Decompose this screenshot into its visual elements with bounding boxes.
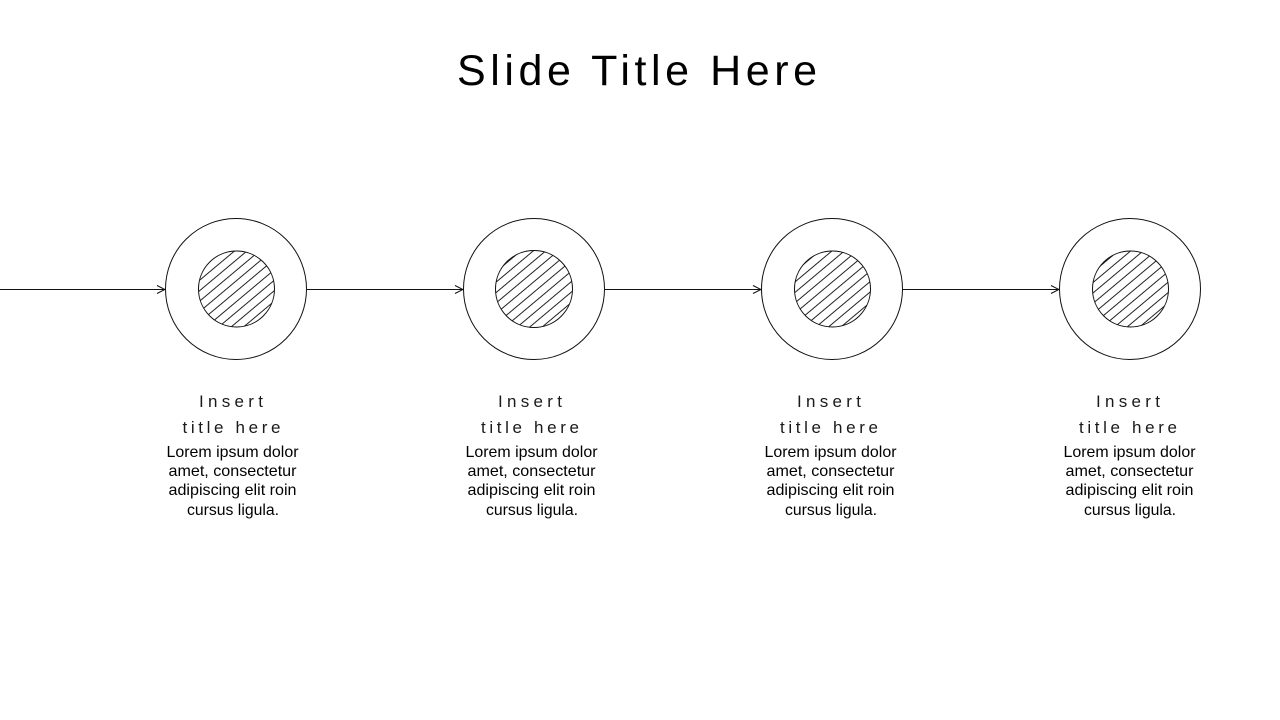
- step 1: [166, 218, 306, 519]
- step 1 heading: Insert: [199, 392, 263, 411]
- step 2: [464, 218, 604, 519]
- step 1 body text: Lorem ipsum dolor: [166, 444, 299, 461]
- step 3 body text: Lorem ipsum dolor: [764, 444, 897, 461]
- arrow: entry to step 1: [0, 288, 165, 290]
- step 4 heading: Insert: [1096, 392, 1160, 411]
- step 3 body text: amet, consectetur: [766, 463, 895, 480]
- step 4 body text: adipiscing elit roin: [1066, 482, 1194, 499]
- step 3 heading: title here: [780, 418, 878, 437]
- step 4 body text: Lorem ipsum dolor: [1064, 444, 1196, 461]
- step 2 body text: cursus ligula.: [486, 502, 578, 519]
- step 2 heading: Insert: [498, 392, 562, 411]
- icon: step 2 target circle: [464, 218, 604, 360]
- icon: step 3 target circle: [762, 218, 902, 360]
- step 1 body text: adipiscing elit roin: [168, 482, 296, 499]
- title: Slide Title Here: [457, 47, 817, 95]
- step 4: [1060, 218, 1200, 519]
- step 2 body text: amet, consectetur: [468, 463, 596, 480]
- step 1 body text: amet, consectetur: [168, 463, 297, 480]
- step 4 body text: amet, consectetur: [1066, 463, 1194, 480]
- step 4 body text: cursus ligula.: [1084, 502, 1176, 519]
- arrow: step 3 to step 4: [903, 288, 1059, 290]
- arrow: step 1 to step 2: [307, 288, 463, 290]
- step 4 heading: title here: [1079, 418, 1177, 437]
- step 1 body text: cursus ligula.: [187, 502, 279, 519]
- step 3: [762, 218, 902, 519]
- icon: step 4 target circle: [1060, 218, 1200, 360]
- step 3 heading: Insert: [797, 392, 861, 411]
- step 2 body text: adipiscing elit roin: [468, 482, 596, 499]
- step 3 body text: adipiscing elit roin: [766, 482, 894, 499]
- step 1 heading: title here: [182, 418, 280, 437]
- arrow: step 2 to step 3: [605, 288, 761, 290]
- step 3 body text: cursus ligula.: [785, 502, 877, 519]
- step 2 heading: title here: [481, 418, 579, 437]
- step 2 body text: Lorem ipsum dolor: [466, 444, 598, 461]
- icon: step 1 target circle: [166, 218, 306, 360]
